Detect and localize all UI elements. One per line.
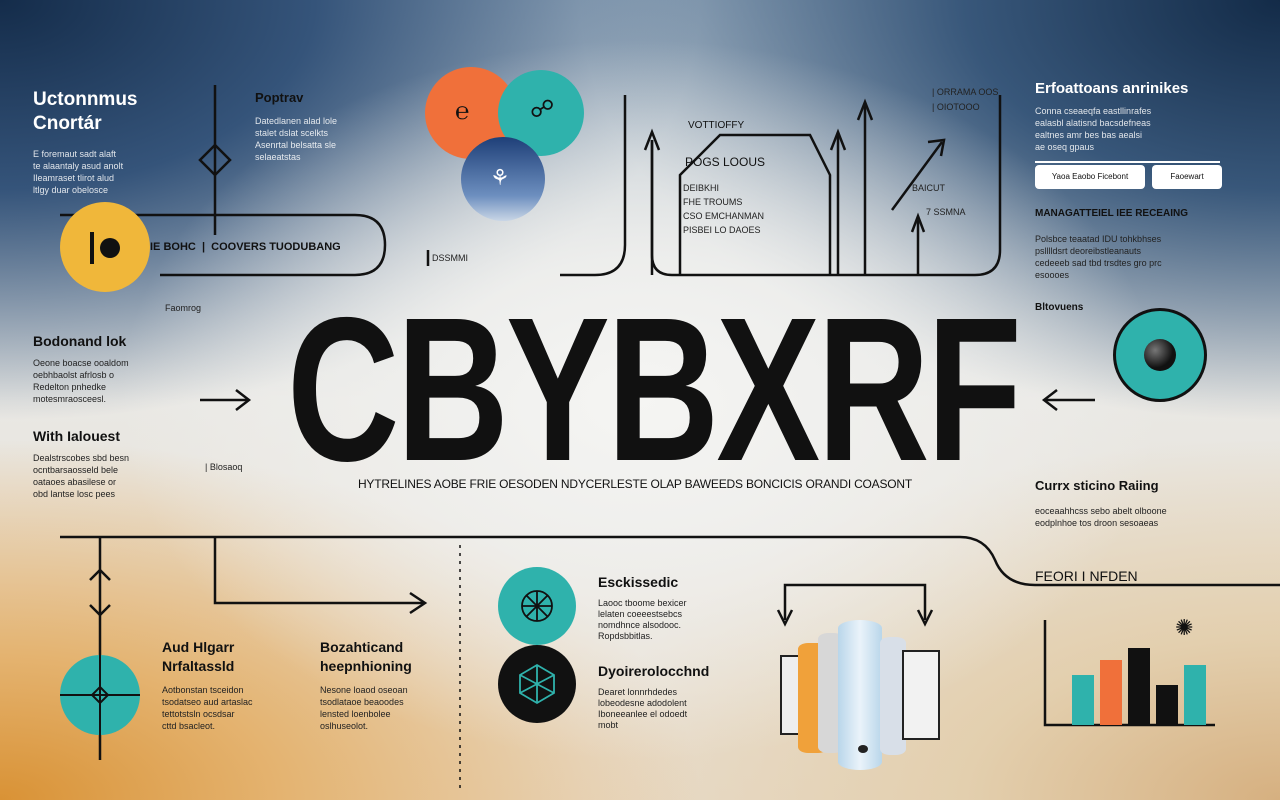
left mid blocks — [33, 333, 129, 404]
text: Dealstrscobes sbd besn — [33, 453, 129, 463]
right mid block — [1035, 478, 1167, 528]
text: Faoewart — [1170, 172, 1204, 181]
house labels: POGS LOOUS — [685, 155, 765, 169]
bottom-left block: Aud Hlgarr — [162, 639, 234, 655]
top small labels — [932, 87, 998, 112]
right mid block: eodplnhoe tos droon sesoaeas — [1035, 518, 1158, 528]
top-right block: ae oseq gpaus — [1035, 142, 1094, 152]
subtitle: HYTRELINES AOBE FRIE OESODEN NDYCERLESTE OLAP BAWEEDS BONCICIS ORANDI COASONT — [358, 477, 912, 491]
circles cluster: ⚘ — [490, 165, 510, 190]
top-left heading block: Ileamraset tlirot alud — [33, 173, 114, 183]
block: Dyoirerolocchnd: Dyoirerolocchnd — [598, 663, 709, 679]
bar chart — [1072, 615, 1206, 725]
block: Dyoirerolocchnd: mobt — [598, 720, 618, 730]
right mid block: Currx sticino Raiing — [1035, 478, 1159, 493]
bottom-left block: tsodatseo aud artaslac — [162, 697, 253, 707]
left mid blocks: motesmraosceesl. — [33, 394, 106, 404]
top small labels: | ORRAMA OOS — [932, 87, 998, 97]
house labels: CSO EMCHANMAN — [683, 211, 764, 221]
bottom mid-left block: lensted loenbolee — [320, 709, 391, 719]
block: Dyoirerolocchnd — [598, 663, 709, 730]
right mid block: eoceaahhcss sebo abelt olboone — [1035, 506, 1167, 516]
block: Esckissedic: lelaten coeeestsebcs — [598, 609, 682, 619]
circles cluster — [425, 67, 584, 221]
top small labels: | OIOTOOO — [932, 102, 980, 112]
block: Esckissedic: Ropdsbbitlas. — [598, 631, 653, 641]
icon: teal circle with ball — [1113, 308, 1207, 402]
top-left heading block: Uctonnmus — [33, 89, 138, 110]
icon: cylinders — [780, 620, 940, 770]
right text block — [1035, 208, 1188, 280]
house labels: DEIBKHI — [683, 183, 719, 193]
label: bottom ticker: DSSMMI — [432, 253, 468, 263]
icon: teal web circle — [498, 567, 576, 645]
text block: Poptrav: stalet dslat scelkts — [255, 128, 328, 138]
right text block: pslllldsrt deoreibstleanauts — [1035, 246, 1141, 256]
text: | Blosaoq — [205, 462, 242, 472]
block: Dyoirerolocchnd: Dearet lonnrhdedes — [598, 687, 677, 697]
title: CBYBXRF — [287, 275, 1019, 504]
block: Esckissedic — [598, 574, 687, 641]
bottom-left block: cttd bsacleot. — [162, 721, 215, 731]
left mid blocks: Oeone boacse ooaldom — [33, 358, 129, 368]
left mid blocks: Bodonand lok — [33, 333, 126, 349]
bottom-left block — [162, 639, 253, 731]
buttons: Yaoa Eaobo Ficebont — [1052, 172, 1128, 181]
top-right block: Conna cseaeqfa eastllinrafes — [1035, 106, 1151, 116]
bottom mid-left block: Nesone loaod oseoan — [320, 685, 408, 695]
icon: teal crosshair circle — [60, 655, 140, 735]
text: BAICUT — [912, 183, 945, 193]
house labels: VOTTIOFFY — [688, 120, 744, 131]
text block: Poptrav: selaeatstas — [255, 152, 301, 162]
bottom-left block: tettotstsln ocsdsar — [162, 709, 235, 719]
top-right block: Erfoattoans anrinikes — [1035, 80, 1188, 97]
left mid blocks: Redelton pnhedke — [33, 382, 106, 392]
bottom-left block: Nrfaltassld — [162, 658, 234, 674]
top-right block: ealtnes amr bes bas aealsi — [1035, 130, 1142, 140]
circles cluster: ☍ — [530, 96, 554, 123]
right text block: esoooes — [1035, 270, 1069, 280]
text: FEORI I NFDEN — [1035, 568, 1138, 584]
text: Bltovuens — [1035, 302, 1083, 313]
house labels — [683, 120, 765, 235]
text block: Poptrav — [255, 90, 337, 162]
house labels: FHE TROUMS — [683, 197, 742, 207]
text: With Ialouest — [33, 428, 120, 444]
bottom mid-left block: oslhuseolot. — [320, 721, 368, 731]
bottom mid-left block: heepnhioning — [320, 658, 412, 674]
text block: Poptrav: Poptrav — [255, 90, 303, 105]
right text block: Polsbce teaatad IDU tohkbhses — [1035, 234, 1161, 244]
bottom mid-left block — [320, 639, 412, 731]
top-right block — [1035, 80, 1220, 163]
block: Dyoirerolocchnd: lobeodesne adodolent — [598, 698, 687, 708]
icon: yellow circle — [60, 202, 150, 292]
bottom mid-left block: tsodlataoe beaoodes — [320, 697, 404, 707]
top-right block: ealasbl alatisnd bacsdefneas — [1035, 118, 1151, 128]
left mid blocks: oebhbaolst afrlosb o — [33, 370, 114, 380]
right text block: cedeeeb sad tbd trsdtes gro prc — [1035, 258, 1162, 268]
top-left heading block: ltlgy duar obelosce — [33, 185, 108, 195]
label row: IE BOHC | COOVERS TUODUBANG — [150, 241, 341, 253]
block: Esckissedic: Esckissedic — [598, 574, 678, 590]
label: Faomrog: Faomrog — [165, 303, 201, 313]
text: obd lantse losc pees — [33, 489, 115, 499]
text: oataoes abasilese or — [33, 477, 116, 487]
icon: black web circle — [498, 645, 576, 723]
house labels: PISBEI LO DAOES — [683, 225, 761, 235]
bottom mid-left block: Bozahticand — [320, 639, 403, 655]
top-left heading block — [33, 89, 138, 195]
text: 7 SSMNA — [926, 207, 966, 217]
block: Esckissedic: Laooc tboome bexicer — [598, 598, 687, 608]
circles cluster: ℮ — [455, 98, 469, 125]
text block: Poptrav: Asenrtal belsatta sle — [255, 140, 336, 150]
block: Esckissedic: nomdhnce alsodooc. — [598, 620, 681, 630]
block: Dyoirerolocchnd: Iboneeanlee el odoedt — [598, 709, 687, 719]
text: ocntbarsaosseld bele — [33, 465, 118, 475]
text block: Poptrav: Datedlanen alad lole — [255, 116, 337, 126]
top-left heading block: te alaantaly asud anolt — [33, 161, 123, 171]
top-left heading block: Cnortár — [33, 113, 102, 134]
bar chart: ✺ — [1175, 615, 1193, 640]
top-left heading block: E foremaut sadt alaft — [33, 149, 116, 159]
right text block: MANAGATTEIEL IEE RECEAING — [1035, 208, 1188, 219]
bottom-left block: Aotbonstan tsceidon — [162, 685, 244, 695]
buttons — [1035, 165, 1145, 189]
